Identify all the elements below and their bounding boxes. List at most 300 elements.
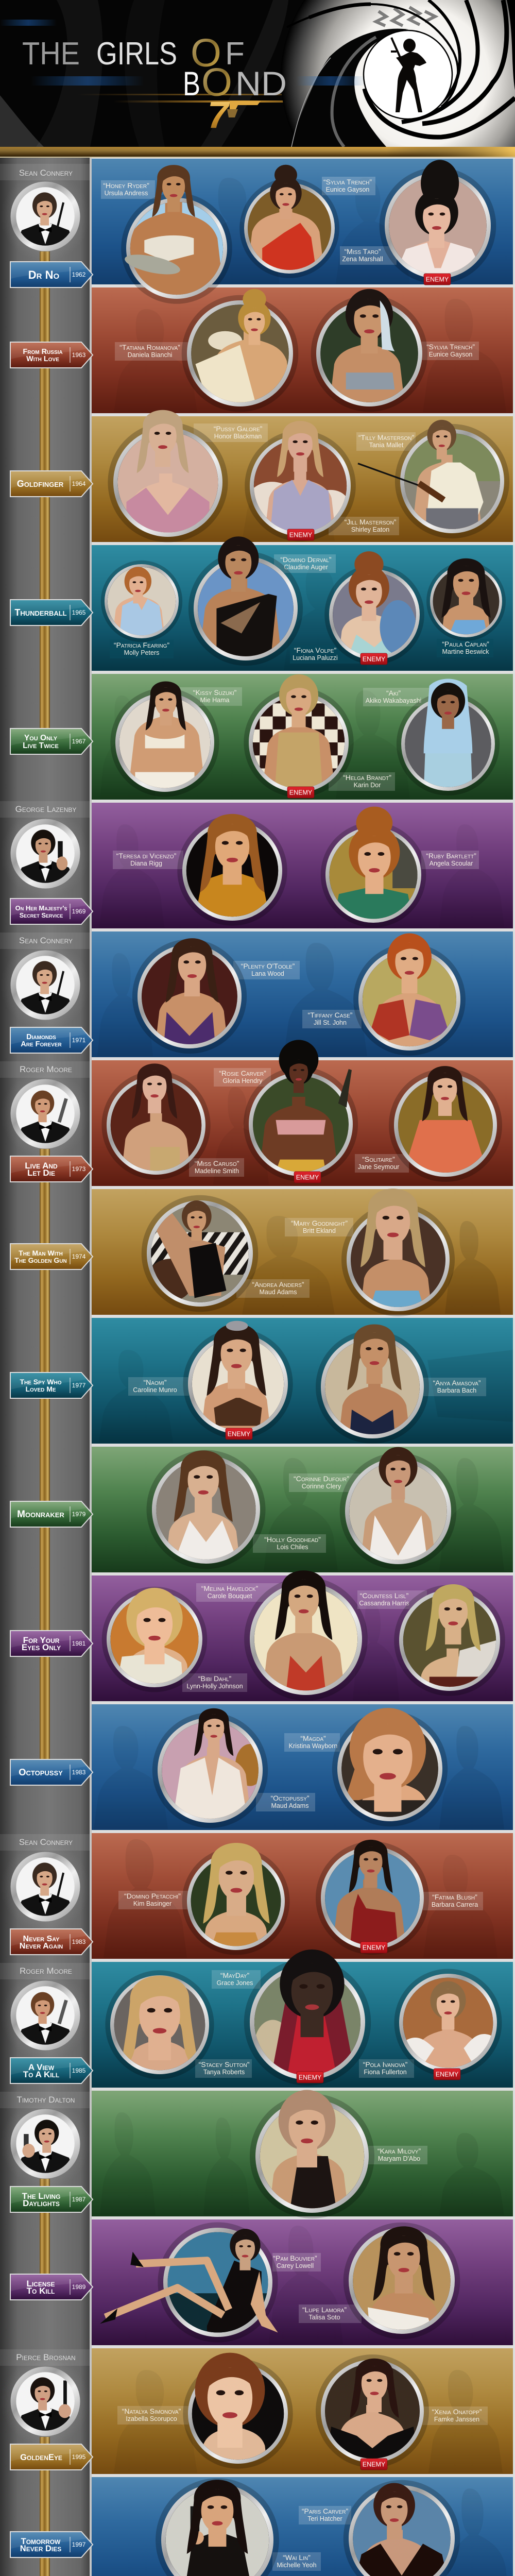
film tag: The Living Daylights 1987: The Living <box>22 2191 60 2201</box>
panel: Never Say Never Again <box>92 1833 513 1959</box>
label: Pola Ivanova: “Pola Ivanova” <box>363 2060 408 2069</box>
portrait: Kissy Suzuki <box>110 682 219 798</box>
film tag: On Her Majesty's Secret Service 1969: 1969 <box>72 908 86 915</box>
portrait: Teresa di Vicenzo <box>177 814 287 926</box>
film tag: Tomorrow Never Dies 1997 <box>10 2532 93 2557</box>
label: Tiffany Case: “Tiffany Case” <box>308 1011 353 1019</box>
panel: GoldenEye <box>92 2348 513 2474</box>
label: Jill Masterson: Shirley Eaton <box>351 526 389 533</box>
portrait: Wai Lin <box>156 2478 279 2576</box>
label: Miss Caruso <box>189 1158 244 1177</box>
title: THE <box>22 36 80 72</box>
label: Paris Carver <box>299 2506 351 2524</box>
label: Tiffany Case: Jill St. John <box>314 1019 347 1026</box>
title: F <box>225 36 245 72</box>
gold divider bar <box>0 147 515 158</box>
film tag: The Man With The Golden Gun 1974 <box>10 1244 93 1269</box>
portrait: Bibi Dahl <box>102 1587 207 1722</box>
badge: enemy: ENEMY <box>363 2461 386 2468</box>
film tag: Never Say Never Again 1983 <box>10 1929 93 1955</box>
label: Sylvia Trench: Eunice Gayson <box>326 186 369 193</box>
label: Naomi: Caroline Munro <box>133 1386 177 1394</box>
label: Andrea Anders: Maud Adams <box>260 1289 297 1296</box>
portrait: Holly Goodhead <box>146 1450 266 1596</box>
label: Plenty O'Toole <box>233 961 300 979</box>
label: Fiona Volpe: “Fiona Volpe” <box>294 646 336 654</box>
film tag: Never Say Never Again 1983: 1983 <box>72 1938 86 1945</box>
label: Miss Taro: Zena Marshall <box>342 256 383 263</box>
badge: enemy <box>360 2459 387 2470</box>
label: Natalya Simonova: “Natalya Simonova” <box>122 2407 181 2415</box>
actor: Sean Connery (Never Say Never Again) <box>0 1834 90 1922</box>
film tag: Moonraker 1979 <box>10 1501 93 1527</box>
actor: Timothy Dalton: Timothy Dalton <box>17 2095 75 2105</box>
actor: Timothy Dalton <box>0 2092 90 2189</box>
label: Solitaire <box>355 1154 409 1173</box>
label: Tatiana Romanova <box>115 342 188 361</box>
film tag: From Russia With Love 1963: From Russia <box>23 348 63 356</box>
panel: From Russia With Love <box>92 287 513 413</box>
portrait: Tatiana Romanova <box>181 289 299 412</box>
film tag: The Spy Who Loved Me 1977: Loved Me <box>25 1385 56 1393</box>
badge: enemy <box>287 529 314 540</box>
actor: Sean Connery (Dr No) <box>0 164 90 261</box>
label: Teresa di Vicenzo: Diana Rigg <box>130 860 162 867</box>
film tag: A View To A Kill 1985: 1985 <box>72 2067 86 2074</box>
panel: License To Kill <box>92 2219 513 2345</box>
label: Naomi: “Naomi” <box>143 1378 167 1386</box>
label: Lupe Lamora: Talisa Soto <box>308 2314 340 2321</box>
label: Pola Ivanova: Fiona Fullerton <box>364 2069 407 2076</box>
label: Pussy Galore: Honor Blackman <box>214 433 262 440</box>
title: B <box>183 64 200 103</box>
portrait: Fiona Volpe <box>324 551 424 685</box>
label: Kara Milovy: “Kara Milovy” <box>377 2147 421 2155</box>
girls: The Spy Who Loved Me <box>128 1321 486 1467</box>
portrait: Naomi <box>183 1321 293 1460</box>
actor: Sean Connery (Diamonds Are Forever): Sean Connery <box>19 936 73 945</box>
label: Lupe Lamora <box>299 2304 362 2323</box>
label: Miss Caruso: “Miss Caruso” <box>195 1159 239 1167</box>
film tag: You Only Live Twice 1967: You Only <box>24 734 58 742</box>
portrait: Rosie Carver <box>244 1040 358 1191</box>
title: O <box>191 31 221 75</box>
header background <box>0 0 515 147</box>
label: Honey Ryder: Ursula Andress <box>105 190 148 197</box>
label: Wai Lin: “Wai Lin” <box>283 2553 311 2562</box>
label: Fiona Volpe <box>290 645 359 664</box>
label: Countess Lisl: Cassandra Harris <box>359 1600 409 1607</box>
film tag: The Man With The Golden Gun 1974: The Man With <box>19 1249 63 1257</box>
label: Rosie Carver: Gloria Hendry <box>222 1077 263 1084</box>
film tag: Tomorrow Never Dies 1997: Never Dies <box>20 2544 61 2553</box>
label: Patricia Fearing: Molly Peters <box>124 649 159 656</box>
label: Rosie Carver <box>214 1068 271 1087</box>
actor: Roger Moore (Live And Let Die): Roger Moore <box>20 1064 72 1074</box>
film tag: License To Kill 1989 <box>10 2274 93 2300</box>
badge: enemy: ENEMY <box>228 1430 251 1437</box>
label: Teresa di Vicenzo: “Teresa di Vicenzo” <box>116 852 177 860</box>
label: Stacey Sutton <box>195 2059 252 2078</box>
film tag: On Her Majesty's Secret Service 1969: On Her Majesty's <box>15 904 67 912</box>
actor: Pierce Brosnan: Pierce Brosnan <box>16 2352 76 2362</box>
label: Tilly Masterson: “Tilly Masterson” <box>358 433 414 442</box>
film tag: For Your Eyes Only 1981: 1981 <box>72 1640 86 1647</box>
film tag: License To Kill 1989: To Kill <box>27 2286 55 2296</box>
label: Fatima Blush <box>423 1892 483 1910</box>
label: Ruby Bartlett: Angela Scoular <box>430 860 473 867</box>
label: Melina Havelock <box>196 1583 282 1602</box>
portrait: Countess Lisl <box>394 1584 505 1735</box>
label: Honey Ryder: “Honey Ryder” <box>103 181 149 190</box>
film tag: Goldfinger 1964 <box>10 471 93 497</box>
film tag: You Only Live Twice 1967: 1967 <box>72 738 86 745</box>
film tag: A View To A Kill 1985: A View <box>28 2062 55 2072</box>
portrait: Melina Havelock <box>244 1570 368 1724</box>
girls: Live And Let Die <box>101 1040 502 1198</box>
label: Paris Carver: “Paris Carver” <box>302 2507 348 2515</box>
portrait: Corinne Dufour <box>340 1447 456 1585</box>
label: Domino Derval: Claudine Auger <box>284 564 328 571</box>
label: Kissy Suzuki: Mie Hama <box>200 697 230 704</box>
film tag: Moonraker 1979: Moonraker <box>17 1509 64 1520</box>
portrait: Paula Caplan <box>426 558 506 660</box>
film tag: A View To A Kill 1985 <box>10 2058 93 2083</box>
label: Bibi Dahl <box>182 1673 247 1692</box>
label: May Day: “MayDay” <box>220 1971 249 1979</box>
badge: enemy: ENEMY <box>296 1174 319 1181</box>
portrait: Mary Goodnight <box>341 1189 455 1340</box>
label: Honey Ryder <box>101 180 155 199</box>
label: Miss Caruso: Madeline Smith <box>195 1167 239 1175</box>
film tag: The Living Daylights 1987: Daylights <box>23 2198 60 2208</box>
film tag: Never Say Never Again 1983: Never Again <box>20 1942 63 1951</box>
portrait: Honey Ryder <box>121 165 232 304</box>
portrait: Sylvia Trench <box>239 165 339 278</box>
label: Sylvia Trench: “Sylvia Trench” <box>323 178 372 186</box>
film tag: Diamonds Are Forever 1971: Diamonds <box>26 1033 56 1041</box>
portrait: Stacey Sutton <box>105 1970 214 2117</box>
film tag: The Man With The Golden Gun 1974: The Golden Gun <box>14 1256 67 1264</box>
panel: The Man With The Golden Gun <box>92 1189 513 1315</box>
actor: Roger Moore (A View To A Kill) <box>0 1963 90 2050</box>
film tag: A View To A Kill 1985: To A Kill <box>23 2070 59 2079</box>
label: Kara Milovy: Maryam D'Abo <box>378 2155 420 2162</box>
label: Fatima Blush: Barbara Carrera <box>432 1901 478 1908</box>
film tag: Diamonds Are Forever 1971: Are Forever <box>21 1040 62 1048</box>
label: Fatima Blush: “Fatima Blush” <box>432 1893 477 1901</box>
portrait: Xenia Onatopp <box>316 2354 429 2494</box>
label: Countess Lisl <box>357 1590 427 1609</box>
label: Pussy Galore: “Pussy Galore” <box>214 425 263 433</box>
title: ND <box>235 64 287 103</box>
label: Andrea Anders <box>236 1279 310 1298</box>
panel: You Only Live Twice <box>92 674 513 800</box>
film tag: GoldenEye 1995: 1995 <box>72 2453 86 2461</box>
label: Anya Amasova: “Anya Amasova” <box>433 1379 481 1387</box>
label: Sylvia Trench <box>322 177 375 195</box>
actor: George Lazenby <box>0 801 90 888</box>
film tag: Thunderball 1965 <box>10 600 93 625</box>
film tag: Diamonds Are Forever 1971 <box>10 1027 93 1053</box>
portrait: Kara Milovy <box>250 2090 374 2242</box>
label: Wai Lin: Michelle Yeoh <box>277 2562 317 2569</box>
film tag: On Her Majesty's Secret Service 1969 <box>10 899 93 924</box>
portrait: Patricia Fearing <box>101 561 182 642</box>
label: Sylvia Trench: Eunice Gayson <box>429 351 472 358</box>
label: Holly Goodhead: “Holly Goodhead” <box>264 1535 321 1544</box>
film tag: From Russia With Love 1963: 1963 <box>72 351 86 359</box>
film tag: Live And Let Die 1973: Live And <box>25 1161 58 1171</box>
film tag: The Living Daylights 1987: 1987 <box>72 2196 86 2203</box>
label: Kara Milovy <box>368 2146 427 2164</box>
label: Patricia Fearing: “Patricia Fearing” <box>114 641 169 649</box>
label: May Day: Grace Jones <box>217 1979 253 1987</box>
portrait: Jill Masterson <box>245 421 356 541</box>
label: Natalya Simonova <box>117 2406 188 2425</box>
label: Lupe Lamora: “Lupe Lamora” <box>302 2306 347 2314</box>
panel: The Living Daylights <box>92 2091 513 2216</box>
film tag: The Man With The Golden Gun 1974: 1974 <box>72 1253 86 1260</box>
panel: Moonraker <box>92 1447 513 1572</box>
label: Paris Carver: Teri Hatcher <box>307 2515 342 2522</box>
panel: Goldfinger <box>92 416 513 542</box>
label: Helga Brandt: “Helga Brandt” <box>343 773 391 782</box>
label: Kissy Suzuki <box>179 687 242 706</box>
badge: enemy <box>424 274 451 285</box>
label: Octopussy: “Octopussy” <box>270 1794 310 1802</box>
portrait: Paris Carver <box>344 2480 460 2576</box>
badge: enemy <box>297 2072 323 2083</box>
portrait: Pola Ivanova <box>394 1969 502 2107</box>
label: Mary Goodnight <box>285 1218 353 1236</box>
label: Holly Goodhead <box>253 1534 326 1553</box>
panel: Thunderball <box>92 545 513 671</box>
sidebar background <box>0 158 92 2576</box>
label: Fiona Volpe: Luciana Paluzzi <box>293 654 338 662</box>
logo: gold 007 <box>208 94 261 136</box>
girls: Dr No <box>101 160 496 332</box>
film tag: Tomorrow Never Dies 1997: Tomorrow <box>21 2537 61 2546</box>
portrait: Helga Brandt <box>244 674 354 804</box>
girls: The Man With The Golden Gun <box>142 1189 455 1340</box>
badge: enemy: ENEMY <box>436 2071 459 2078</box>
panel: The Spy Who Loved Me <box>92 1318 513 1444</box>
film tag: Diamonds Are Forever 1971: 1971 <box>72 1037 86 1044</box>
label: Pola Ivanova <box>359 2059 414 2078</box>
label: Magda <box>284 1733 340 1752</box>
film tag: For Your Eyes Only 1981: Eyes Only <box>22 1642 61 1652</box>
portrait: Andrea Anders <box>142 1195 258 1312</box>
film tag: You Only Live Twice 1967: Live Twice <box>23 741 59 750</box>
portrait: Plenty O'Toole <box>132 938 247 1073</box>
label: Ruby Bartlett <box>421 851 479 869</box>
panel: Octopussy <box>92 1704 513 1830</box>
girls: Goldfinger <box>108 410 509 567</box>
label: Melina Havelock: “Melina Havelock” <box>201 1584 259 1592</box>
portrait: Anya Amasova <box>316 1325 429 1467</box>
actor: George Lazenby: George Lazenby <box>15 804 76 814</box>
film tag: Live And Let Die 1973 <box>10 1156 93 1182</box>
film tag: For Your Eyes Only 1981: For Your <box>23 1635 60 1645</box>
portrait: Domino Petacchi <box>182 1843 289 1987</box>
label: Mary Goodnight: “Mary Goodnight” <box>291 1219 348 1227</box>
label: Domino Derval: “Domino Derval” <box>280 555 332 564</box>
film tag: The Living Daylights 1987 <box>10 2187 93 2212</box>
label: Domino Petacchi: “Domino Petacchi” <box>124 1892 181 1900</box>
label: Helga Brandt <box>329 772 395 791</box>
film tag: Dr No 1962 <box>10 262 93 287</box>
label: Sylvia Trench <box>421 342 479 360</box>
panel: Dr No <box>92 159 513 284</box>
portrait: Domino Derval <box>188 536 303 677</box>
film tag: The Spy Who Loved Me 1977 <box>10 1372 93 1398</box>
girls: Moonraker <box>146 1447 456 1596</box>
film tag: GoldenEye 1995: GoldenEye <box>20 2453 62 2462</box>
portrait: Pam Bouvier <box>100 2222 278 2343</box>
film tag: The Spy Who Loved Me 1977: The Spy Who <box>20 1378 62 1386</box>
label: Tilly Masterson: Tania Mallet <box>369 442 404 449</box>
portrait: Tilly Masterson <box>358 420 509 538</box>
portrait: Natalya Simonova <box>183 2353 293 2505</box>
label: Wai Lin <box>272 2552 321 2571</box>
label: Domino Petacchi: Kim Basinger <box>133 1900 171 1907</box>
label: Pussy Galore <box>194 423 268 442</box>
panel: For Your Eyes Only <box>92 1575 513 1701</box>
label: Paula Caplan <box>437 639 493 657</box>
label: Plenty O'Toole: Lana Wood <box>251 970 284 977</box>
girls: From Russia With Love <box>115 289 479 431</box>
label: Xenia Onatopp <box>422 2406 488 2425</box>
film tag: License To Kill 1989: License <box>26 2279 55 2289</box>
label: Andrea Anders: “Andrea Anders” <box>252 1280 304 1289</box>
label: Magda: “Magda” <box>300 1734 326 1742</box>
film tag: Tomorrow Never Dies 1997: 1997 <box>72 2541 86 2548</box>
label: Mary Goodnight: Britt Ekland <box>303 1227 336 1234</box>
film tag: Thunderball 1965: Thunderball <box>14 607 67 618</box>
label: Solitaire: Jane Seymour <box>358 1163 399 1171</box>
label: Corinne Dufour: Corinne Clery <box>302 1483 341 1490</box>
label: Anya Amasova: Barbara Bach <box>437 1387 476 1394</box>
portrait: Sylvia Trench <box>311 289 427 412</box>
film tag: Live And Let Die 1973: 1973 <box>72 1165 86 1173</box>
portrait: Lupe Lamora <box>344 2223 460 2374</box>
girls: You Only Live Twice <box>110 674 500 804</box>
film tag: GoldenEye 1995 <box>10 2444 93 2470</box>
portrait: Miss Caruso <box>101 1063 211 1198</box>
panel frame <box>90 158 515 2576</box>
actor: Roger Moore (A View To A Kill): Roger Moore <box>20 1966 72 1976</box>
label: Domino Derval <box>274 554 336 573</box>
film tag: Octopussy 1983: Octopussy <box>19 1767 63 1777</box>
film tag: Live And Let Die 1973: Let Die <box>27 1168 55 1178</box>
actor: Pierce Brosnan <box>0 2349 90 2446</box>
portrait: Magda <box>332 1708 448 1866</box>
panel: Diamonds Are Forever <box>92 931 513 1057</box>
girls: For Your Eyes Only <box>102 1570 505 1735</box>
badge: enemy <box>287 787 314 798</box>
actor: Sean Connery (Diamonds Are Forever) <box>0 933 90 1020</box>
title <box>22 31 287 105</box>
badge: enemy <box>294 1172 321 1183</box>
film tag: Octopussy 1983 <box>10 1759 93 1785</box>
label: Bibi Dahl: “Bibi Dahl” <box>198 1674 232 1683</box>
portrait: Aki <box>397 679 500 795</box>
gold timeline pole <box>40 251 50 2576</box>
badge: enemy <box>434 2069 460 2080</box>
label: Paula Caplan: “Paula Caplan” <box>442 640 489 648</box>
label: Holly Goodhead: Lois Chiles <box>277 1544 308 1551</box>
title: GIRLS <box>96 36 177 72</box>
label: Naomi <box>128 1377 189 1396</box>
label: Patricia Fearing <box>110 640 174 658</box>
badge: enemy: ENEMY <box>289 532 313 539</box>
label: Plenty O'Toole: “Plenty O'Toole” <box>241 962 295 970</box>
girls: Octopussy <box>152 1708 448 1866</box>
film tag: Dr No 1962: 1962 <box>72 271 86 278</box>
portrait: Ruby Bartlett <box>321 807 426 927</box>
label: Natalya Simonova: Izabella Scorupco <box>126 2415 177 2422</box>
film tag: Dr No 1962: Dr No <box>28 268 60 281</box>
portrait: Solitaire <box>389 1066 502 1182</box>
label: Magda: Kristina Wayborn <box>289 1742 337 1750</box>
icon: woman silhouette with rifle <box>391 38 426 112</box>
panel: Tomorrow Never Dies <box>92 2477 513 2576</box>
film tag: Goldfinger 1964: 1964 <box>72 480 86 487</box>
label: Teresa di Vicenzo <box>113 851 183 869</box>
badge: enemy <box>360 1942 387 1953</box>
badge: enemy: ENEMY <box>299 2074 322 2081</box>
label: Domino Petacchi <box>118 1891 188 1909</box>
badge: enemy: ENEMY <box>363 655 386 663</box>
logo: gold 007: 7 <box>208 94 230 136</box>
label: Bibi Dahl: Lynn-Holly Johnson <box>186 1683 243 1690</box>
badge: enemy <box>226 1428 252 1439</box>
film tag: Moonraker 1979: 1979 <box>72 1511 86 1518</box>
title: O <box>201 60 232 105</box>
label: Corinne Dufour <box>289 1473 359 1492</box>
label: May Day <box>212 1970 261 1989</box>
label: Octopussy: Maud Adams <box>271 1802 308 1809</box>
girls: Tomorrow Never Dies <box>156 2478 460 2576</box>
badge: enemy: ENEMY <box>426 276 449 283</box>
panel: On Her Majesty's Secret Service <box>92 803 513 928</box>
label: Miss Taro <box>340 246 397 265</box>
film tag: From Russia With Love 1963 <box>10 342 93 368</box>
gun barrel spiral <box>282 0 515 147</box>
label: Aki <box>363 688 434 706</box>
label: Tiffany Case <box>302 1010 362 1028</box>
portrait: Pussy Galore <box>108 410 228 543</box>
portrait: Miss Taro <box>379 160 496 282</box>
girls: Thunderball <box>101 536 506 666</box>
girls: Diamonds Are Forever <box>132 933 466 1073</box>
label: Paula Caplan: Martine Beswick <box>442 648 489 655</box>
actor: Roger Moore (Live And Let Die) <box>0 1061 90 1159</box>
film tag: Never Say Never Again 1983: Never Say <box>23 1935 60 1943</box>
girls: GoldenEye <box>117 2353 488 2505</box>
label: Stacey Sutton: “Stacey Sutton” <box>199 2060 250 2069</box>
film tag: Thunderball 1965: 1965 <box>72 609 86 616</box>
film tag: For Your Eyes Only 1981 <box>10 1631 93 1656</box>
label: Solitaire: “Solitaire” <box>362 1155 395 1163</box>
girls: On Her Majesty's Secret Service <box>113 807 479 927</box>
label: Helga Brandt: Karin Dor <box>354 782 381 789</box>
label: Tatiana Romanova: “Tatiana Romanova” <box>119 343 180 351</box>
portrait: May Day <box>244 1950 371 2086</box>
label: Sylvia Trench: “Sylvia Trench” <box>426 343 475 351</box>
label: Octopussy <box>256 1793 315 1811</box>
